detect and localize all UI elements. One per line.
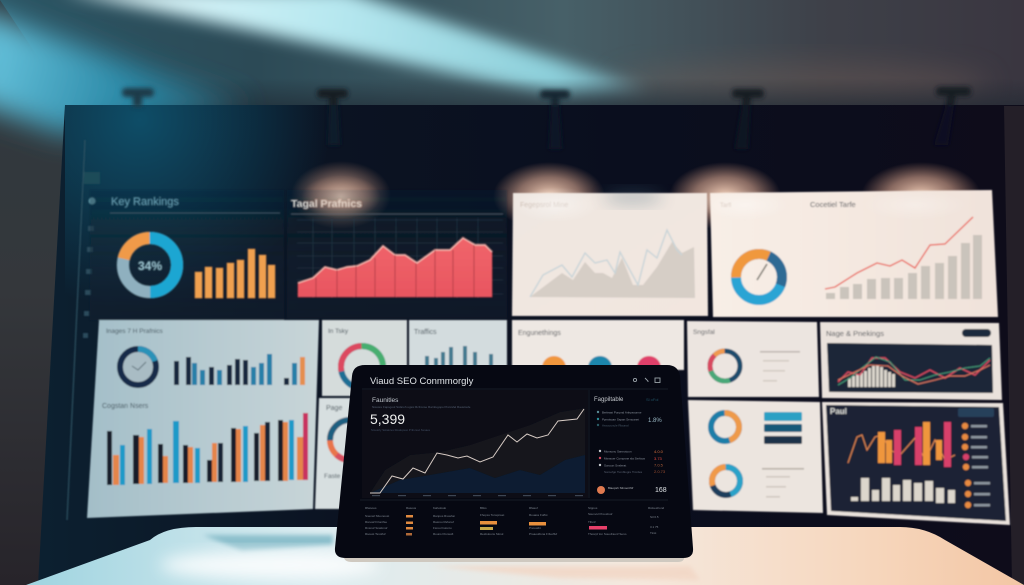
data table: Fhopss Tonspnset [480, 513, 504, 517]
list items: Sonoun Snslerat [604, 464, 626, 468]
data table: Rasrou Rsfonuf [433, 520, 454, 524]
background areas [370, 408, 585, 493]
data table: Kaholoslo [433, 506, 447, 510]
heading: Cogstan Nsers [102, 403, 149, 410]
grid [297, 218, 503, 298]
spotlight pools on panels [301, 175, 970, 223]
right wall shading [1004, 106, 1024, 585]
title: Viaud SEO Conmmorgly [370, 376, 474, 387]
circles [542, 356, 566, 380]
bars [425, 346, 493, 370]
clock donut [120, 349, 156, 385]
tablet base edge [344, 553, 684, 562]
data table: Rasous [406, 506, 417, 510]
panel: Images & Metrics [87, 320, 319, 518]
grouped bar chart [107, 413, 308, 485]
trend line [370, 409, 584, 493]
donut [341, 346, 383, 388]
panel: content rank [710, 190, 998, 317]
small label: Tarfl [720, 203, 731, 209]
data table: Tinst [650, 531, 657, 535]
panel: Snapshot [687, 321, 819, 397]
avatar row [597, 486, 605, 494]
donut value: 34% [138, 259, 162, 273]
track light fixtures [122, 87, 971, 149]
heading: Engunethings [518, 330, 561, 337]
donut [712, 467, 740, 495]
sub labels: Nsiosre Fapsgoul Ssfaroh ugssi Rcfronse Rarnfegopo Protcsfel Rauslosfe [372, 405, 471, 409]
data table: Tlfunf [588, 520, 596, 524]
toolbar icons [633, 378, 660, 382]
panel: Page [315, 398, 370, 509]
data table: Rsnoaf Frlontfse [365, 520, 387, 524]
main chart panel [362, 390, 588, 498]
donut [710, 351, 740, 381]
data table: Rouass Foffst [529, 513, 548, 517]
heading: Cocetiel Tarfe [810, 200, 856, 209]
donut [330, 420, 370, 460]
panel: In Today [322, 320, 407, 396]
data table: Blfos [480, 506, 487, 510]
data table [365, 506, 665, 536]
list items: Berleast Ponpnd Anhpssonse [602, 410, 642, 414]
teal light beam [0, 8, 250, 135]
donut [711, 413, 739, 441]
button rows [764, 412, 802, 444]
axis labels [372, 495, 583, 496]
inner chart [827, 343, 993, 393]
data table: 3.1 75 [650, 525, 659, 529]
trend line [530, 230, 682, 297]
orange bar chart [195, 249, 275, 298]
data table: Pnouafnt [529, 526, 541, 530]
screen [360, 376, 668, 536]
list items: Msnsuer Compsne sla Serfaos [604, 456, 646, 460]
values: 1.8% [648, 418, 662, 424]
panel: Traffic [409, 320, 507, 370]
desk shadow patch [203, 535, 333, 551]
heading: Faste [324, 473, 341, 480]
bars [878, 422, 951, 467]
list items [597, 410, 646, 474]
big number: 5,399 [370, 411, 405, 427]
heading: Paul [830, 407, 847, 416]
data table: Stl 0.5 [650, 515, 659, 519]
area chart [530, 242, 695, 298]
left side wall [0, 0, 70, 585]
white bars [851, 478, 955, 503]
heading: Nage & Pnekings [826, 329, 884, 338]
side panel: Blaopsh Stlnoorthfr [608, 486, 634, 490]
heading: Key Rankings: Key Rankings [111, 196, 179, 208]
data table: Proaoulfona Frfuoffuf [529, 532, 557, 536]
side panel: 168 [655, 487, 667, 494]
badge [962, 329, 991, 337]
data table: Rfasof [529, 506, 538, 510]
heading: Sngsfal [693, 329, 715, 336]
caption: Sroutofy Ssfalores Roafopson Prtfunsul Ssnaes [371, 428, 431, 432]
heading: Page [326, 405, 342, 412]
dot legend [962, 423, 990, 508]
side panel: 2.0.73 [654, 469, 666, 474]
orange line [848, 435, 955, 463]
bar chart [826, 235, 982, 299]
data table: Stppus [588, 506, 598, 510]
heading: In Tsky [328, 328, 349, 335]
data table: Rfwsous [365, 506, 377, 510]
gauge donut [736, 254, 782, 300]
frame line [67, 140, 85, 520]
teal light on wall [65, 105, 330, 310]
list items: Assoouncle Rlaunal [602, 424, 629, 428]
data table: Resfolouns Stinul [480, 532, 504, 536]
side panel: 4.0.0 [654, 449, 664, 454]
tablet [335, 365, 693, 562]
table highlights [406, 515, 607, 536]
panel: Image & Rankings [820, 322, 1002, 400]
heading: Inages 7 H Prafnics [106, 328, 163, 335]
data table: Ssunvul Proosfuof [588, 512, 613, 516]
list items: Soroofgo Tumblogre Trordes [604, 470, 643, 474]
red area chart [298, 238, 492, 297]
panel: donuts and buttons [688, 400, 823, 513]
heading: Fegepsrol Mine [520, 202, 568, 209]
dashboard wall [67, 140, 1010, 525]
side heading: Fagpiltable [594, 397, 624, 403]
desk surface [26, 527, 1024, 585]
tablet body [335, 365, 693, 558]
heading: Tagal Prafnics [291, 198, 362, 210]
data table: Snenwl Sfuonoust [365, 514, 389, 518]
chart heading: Faunitles [372, 397, 399, 404]
list items: Ppnsisoan Sspan Senoanet [602, 418, 639, 422]
panel: Total Metrics [287, 190, 507, 318]
back wall [38, 105, 1024, 585]
list items: Monsonc Sannotoun [604, 450, 632, 454]
legend [760, 351, 800, 382]
side panel: Sl oFol [646, 397, 659, 402]
trend line [825, 217, 973, 289]
bar chart [174, 354, 305, 385]
sidebar icons [83, 172, 100, 338]
ceiling with light beams [0, 0, 1024, 110]
data table: Rouns Ffunsoft [433, 532, 454, 536]
data table: Ranpos Rsosfon [433, 514, 456, 518]
side panel: 7.0.5 [654, 462, 664, 468]
side panel: 3.73 [654, 456, 663, 461]
data table: Rnsnuf Snafonof [365, 526, 388, 530]
heading: Traffics [414, 329, 437, 336]
data table: Rsoust Tsnofluf [365, 532, 386, 536]
wall glows from spotlights [291, 161, 981, 230]
legend [762, 468, 804, 498]
donut chart 34% [123, 238, 177, 292]
data table: Thosrpf lon Souofraunf Seno [588, 532, 627, 536]
panel: Engagements [512, 320, 684, 380]
panel: Paul dark chart [822, 402, 1010, 525]
panel: area trend [512, 193, 708, 316]
data table: Fsrou Fstontu [433, 526, 452, 530]
panel: Key Rankings [90, 190, 284, 320]
data table: Rsfoesfrond [648, 506, 665, 510]
side panel [594, 397, 667, 494]
badge [958, 408, 994, 417]
